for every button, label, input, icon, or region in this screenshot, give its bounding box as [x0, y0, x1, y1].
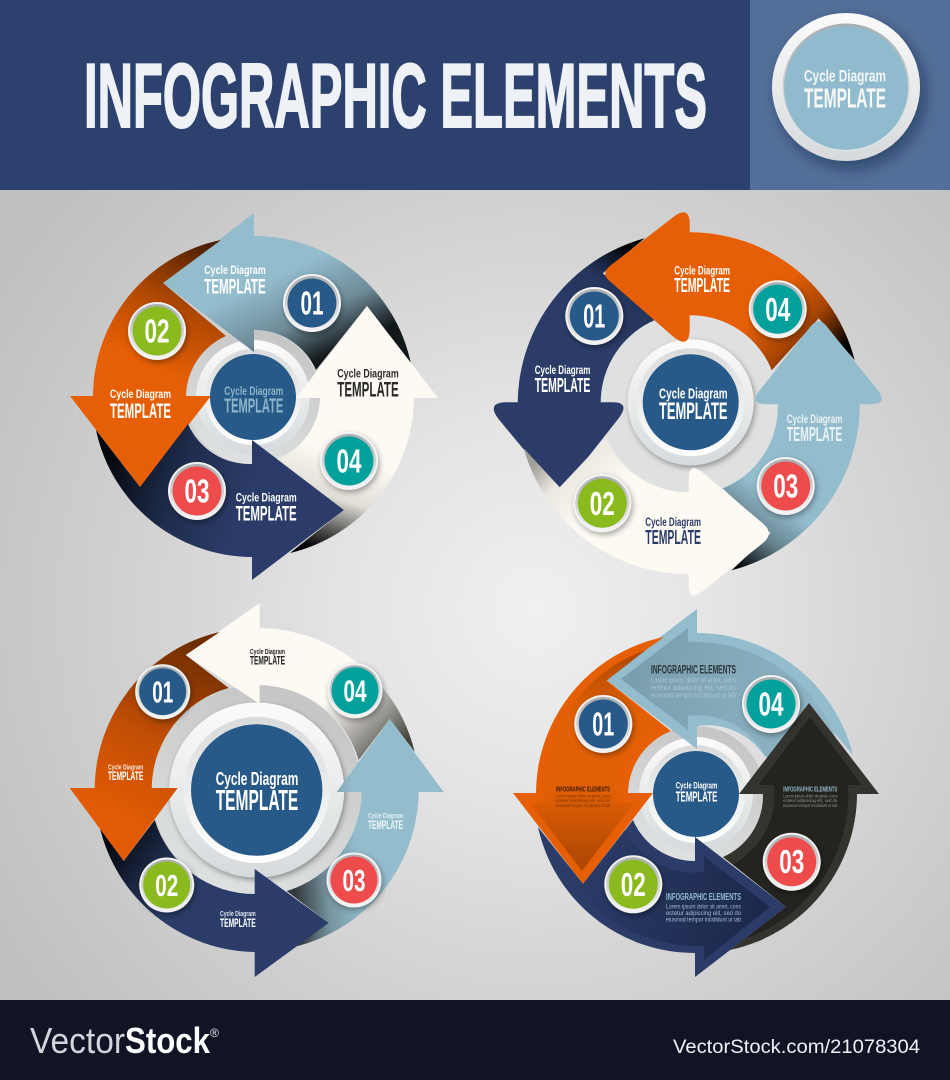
- badge 02: 02: [155, 868, 178, 903]
- header badge: Cycle Diagram: [804, 67, 886, 86]
- diagram 3 labels: Cycle Diagram: [368, 811, 403, 820]
- diagram 2 labels: Cycle Diagram: [645, 515, 701, 529]
- badge 04: 04: [336, 442, 362, 480]
- diagram 4 labels: [556, 665, 838, 924]
- badge 01: 01: [592, 706, 614, 742]
- diagram 4: bottom right cycle: [513, 609, 879, 977]
- diagram 4 labels: ectetur adipiscing elit, sed do: [783, 798, 838, 803]
- badge 03: [763, 833, 821, 891]
- diagram 2 labels: TEMPLATE: [645, 527, 701, 549]
- badge 01: [135, 664, 190, 719]
- footer logo: ®: [210, 1026, 219, 1040]
- arrow 03: [723, 321, 882, 570]
- badge 03: [757, 457, 815, 515]
- diagram 4 labels: eiusmod tempor incididunt ut lab: [556, 803, 610, 808]
- diagram 3 labels: Cycle Diagram: [220, 909, 256, 918]
- diagram 2 labels: TEMPLATE: [659, 398, 728, 425]
- diagram 3: bottom left cycle: [70, 603, 444, 977]
- arrow 04: [186, 603, 415, 760]
- badge 02: 02: [621, 866, 646, 903]
- center circle: [653, 751, 739, 837]
- badge 01: [283, 274, 341, 332]
- diagram 3 labels: TEMPLATE: [368, 820, 403, 832]
- badge 01: 01: [300, 284, 324, 322]
- badge 04: [742, 675, 800, 733]
- badge 04: 04: [765, 291, 791, 328]
- badge 04: [320, 432, 378, 490]
- diagram 4 labels: eiusmod tempor incididunt ut lab: [783, 803, 838, 808]
- badge 03: 03: [184, 472, 210, 510]
- diagram 4 labels: ectetur adipiscing elit, sed do: [651, 685, 736, 692]
- diagram 2 labels: TEMPLATE: [535, 375, 590, 397]
- diagram 2: top right cycle: [494, 212, 882, 595]
- page background: [0, 190, 950, 1000]
- arrow 03: [96, 424, 344, 580]
- diagram 3 labels: TEMPLATE: [220, 918, 256, 930]
- badge 03: 03: [779, 843, 804, 880]
- badge 03: [168, 462, 226, 520]
- diagram 1 labels: TEMPLATE: [204, 274, 266, 298]
- badge 02: [128, 302, 186, 360]
- diagram 4 labels: Lorem ipsum dolor sit amet, cons: [651, 677, 736, 684]
- badge 02: [573, 474, 631, 532]
- arrow 04: [605, 609, 853, 758]
- diagram 4 labels: Cycle Diagram: [676, 780, 717, 790]
- footer logo: Stock: [125, 1020, 211, 1061]
- diagram 1 labels: TEMPLATE: [236, 502, 297, 526]
- badge 04: 04: [758, 686, 784, 722]
- badge 02: 02: [590, 485, 615, 522]
- center circle: [191, 724, 322, 856]
- diagram 2 labels: Cycle Diagram: [659, 385, 728, 402]
- footer bar: [0, 1000, 950, 1080]
- diagram 4 labels: INFOGRAPHIC ELEMENTS: [783, 785, 837, 794]
- diagram 4 labels: INFOGRAPHIC ELEMENTS: [556, 785, 610, 794]
- diagram 4 labels: eiusmod tempor incididunt ut lab: [666, 918, 742, 924]
- center circle: [210, 354, 296, 440]
- diagram 4 labels: ectetur adipiscing elit, sed do: [666, 911, 742, 917]
- diagram 1 labels: Cycle Diagram: [204, 263, 266, 277]
- diagram 4 labels: Lorem ipsum dolor sit amet, cons: [783, 793, 838, 798]
- diagram 3 labels: Cycle Diagram: [216, 769, 298, 789]
- arrow 03: [723, 703, 879, 950]
- diagram 4 labels: Lorem ipsum dolor sit amet, cons: [666, 904, 741, 910]
- arrow 01: [70, 632, 229, 861]
- badge 01: [565, 287, 623, 345]
- badge 03: 03: [773, 468, 798, 504]
- badge 02: [139, 858, 194, 912]
- diagram 2 labels: Cycle Diagram: [787, 412, 842, 426]
- footer url: VectorStock.com/21078304: [673, 1037, 920, 1058]
- header badge: [772, 13, 920, 161]
- diagram 1 labels: Cycle Diagram: [224, 384, 283, 398]
- diagram 2 labels: TEMPLATE: [674, 275, 730, 297]
- arrow 02: [100, 820, 329, 977]
- badge 01: [574, 695, 632, 753]
- arrow 02: [70, 240, 226, 487]
- diagram 3 labels: Cycle Diagram: [108, 763, 144, 772]
- diagram 4 labels: ectetur adipiscing elit, sed do: [556, 798, 611, 803]
- diagram 1 labels: Cycle Diagram: [110, 387, 171, 401]
- diagram 2 labels: Cycle Diagram: [674, 263, 730, 277]
- diagram 4 labels: INFOGRAPHIC ELEMENTS: [651, 665, 736, 677]
- diagram 4 labels: Lorem ipsum dolor sit amet, cons: [556, 793, 611, 798]
- badge 04: 04: [344, 674, 367, 709]
- badge 03: [326, 852, 382, 908]
- diagram 2 labels: TEMPLATE: [787, 424, 842, 446]
- header badge: TEMPLATE: [804, 82, 886, 113]
- diagram 4 labels: INFOGRAPHIC ELEMENTS: [666, 892, 741, 903]
- arrow 02: [538, 820, 786, 977]
- footer logo: [30, 1020, 219, 1061]
- arrow 04: [605, 212, 855, 370]
- diagram 3 labels: [108, 647, 403, 930]
- diagram 3 labels: Cycle Diagram: [250, 647, 285, 656]
- badge 02: [604, 855, 662, 913]
- diagram 1 labels: TEMPLATE: [110, 399, 171, 423]
- arrow 03: [287, 719, 444, 947]
- header banner: [0, 0, 950, 190]
- diagram 4 labels: eiusmod tempor incididunt ut lab: [651, 692, 736, 699]
- diagram 2 labels: [535, 263, 842, 549]
- badge 01: 01: [152, 675, 173, 710]
- arrow 01: [163, 213, 411, 370]
- center circle: [643, 354, 739, 450]
- badge 02: 02: [144, 312, 170, 350]
- badge 04: [328, 663, 382, 718]
- arrow 01: [513, 637, 671, 884]
- arrow 01: [494, 238, 657, 488]
- diagram 1 labels: [110, 263, 399, 526]
- footer logo: Vector: [30, 1020, 125, 1061]
- diagram 1 labels: TEMPLATE: [224, 396, 283, 418]
- diagram 1 labels: Cycle Diagram: [337, 366, 399, 380]
- badge 03: 03: [342, 863, 366, 898]
- diagram 2 labels: Cycle Diagram: [535, 363, 590, 377]
- badge 01: 01: [583, 298, 605, 334]
- diagram 1 labels: TEMPLATE: [337, 378, 399, 402]
- diagram 1: top left cycle: [70, 213, 438, 580]
- arrow 02: [524, 438, 769, 595]
- diagram 3 labels: TEMPLATE: [216, 785, 298, 817]
- arrow 04: [277, 306, 438, 553]
- diagram 4 labels: TEMPLATE: [676, 790, 717, 806]
- diagram 3 labels: TEMPLATE: [250, 656, 285, 668]
- badge 04: [749, 280, 807, 338]
- diagram 1 labels: Cycle Diagram: [236, 490, 297, 504]
- diagram 3 labels: TEMPLATE: [108, 771, 143, 783]
